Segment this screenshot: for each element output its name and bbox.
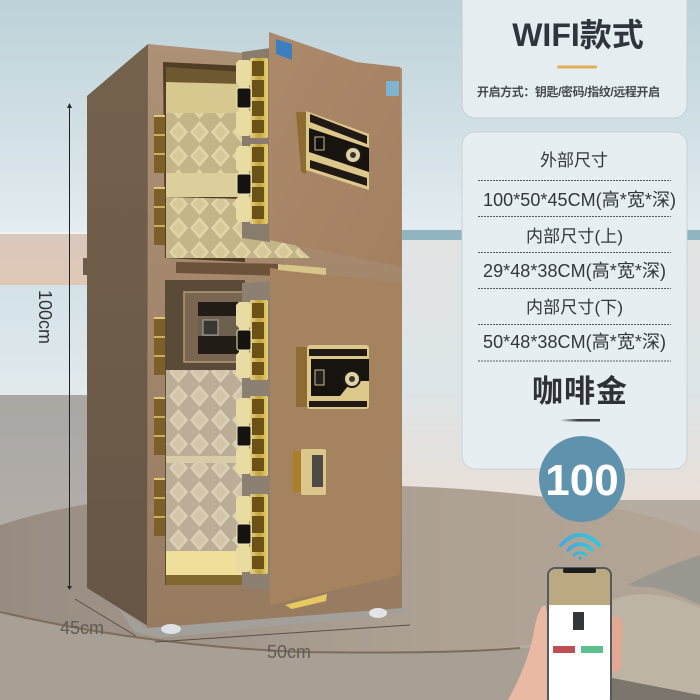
colour name: 咖啡金 [532,374,627,409]
dimension: height arrow [67,103,72,590]
door sticker right [386,81,399,96]
lower door inner edge [242,281,270,590]
title underline [557,66,597,68]
upper door bolts [236,58,268,224]
external size label: 外部尺寸 [540,151,608,170]
dimension label: 100cm: 100cm [35,290,55,344]
upper door inner edge [242,48,270,242]
upper hinge [278,264,326,275]
cabinet side panel [87,44,148,626]
phone with app screen [547,567,612,700]
dimension: width arrow [155,625,410,642]
external size value: 100*50*45CM(高*宽*深) [483,190,676,210]
safe cabinet [83,32,402,634]
upper internal label: 内部尺寸(上) [526,227,623,246]
lower door bolts [236,300,268,574]
upper compartment interior [163,62,310,262]
dimension label: 45cm: 45cm [60,618,104,638]
lower internal value: 50*48*38CM(高*宽*深) [483,332,666,352]
dimension: depth arrow [75,599,136,636]
upper keypad lock [296,111,369,190]
lower door hinge [285,594,327,609]
badge: capacity 100: 100 [545,456,619,505]
door handle [293,449,326,495]
dimension label: 50cm: 50cm [267,642,311,662]
upper internal value: 29*48*38CM(高*宽*深) [483,261,666,281]
lower internal label: 内部尺寸(下) [526,298,623,317]
lower compartment interior [165,280,245,585]
panel: dimensions card [462,132,687,469]
foot left [161,624,181,634]
opening methods: 开启方式：钥匙/密码/指纹/远程开启 [477,85,660,99]
pillow and sofa [612,555,700,700]
foot right [369,608,387,618]
divider shelf [176,262,285,276]
upper door [269,32,402,267]
icon: wifi signal [561,535,599,560]
model title: WIFI款式 [512,17,644,53]
panel: model card [462,0,687,118]
colour underline [560,419,600,422]
lower keypad lock [296,345,369,409]
hand holding phone [508,605,622,700]
side panel stub [83,258,87,275]
cabinet front frame [147,44,402,628]
left wall bolts [154,115,165,536]
door sticker top [276,39,292,60]
lower door [270,268,402,605]
badge: capacity 100 [539,436,625,522]
